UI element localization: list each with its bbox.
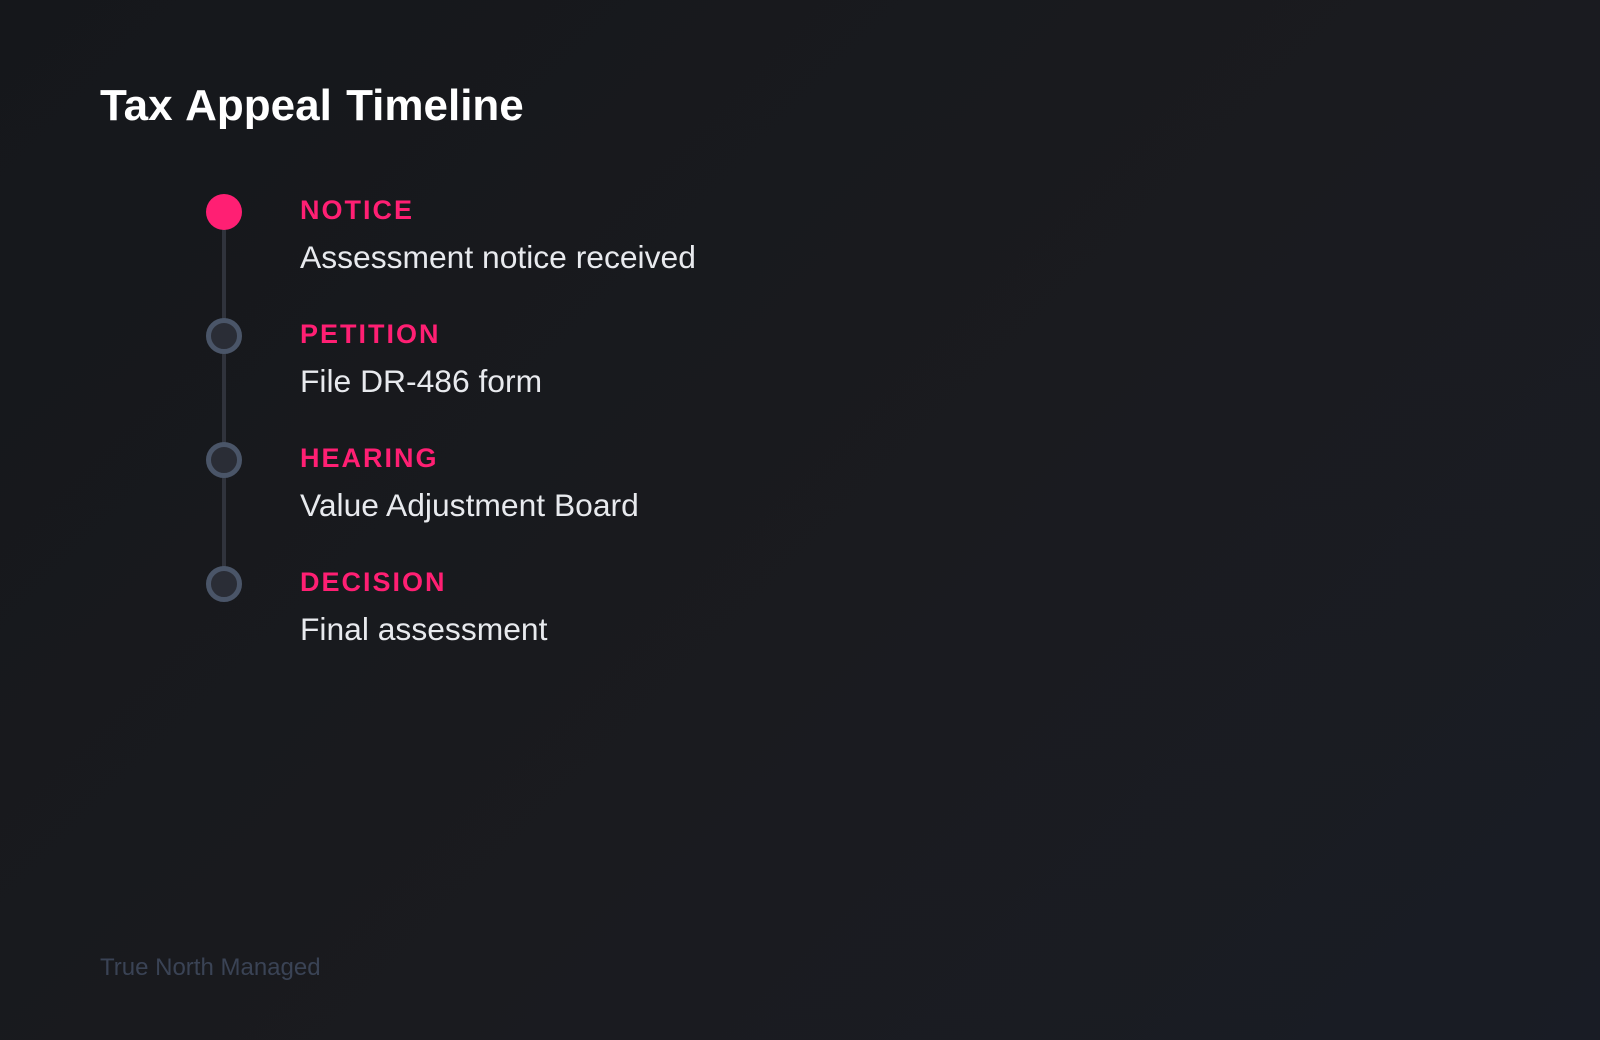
- marker: petition: [206, 318, 242, 354]
- step: decision: Final assessment: [300, 611, 547, 647]
- footer: True North Managed: [100, 954, 321, 981]
- step: hearing: HEARING: [300, 443, 439, 473]
- timeline connector line: [222, 212, 226, 584]
- title: Tax Appeal Timeline: [100, 81, 524, 130]
- step: hearing: Value Adjustment Board: [300, 487, 639, 523]
- marker: decision: [206, 566, 242, 602]
- step: petition: PETITION: [300, 319, 441, 349]
- step: petition: [300, 319, 542, 399]
- step: hearing: [300, 443, 639, 523]
- step: notice: [300, 195, 696, 275]
- step: decision: DECISION: [300, 567, 447, 597]
- step: notice: NOTICE: [300, 195, 414, 225]
- step: notice: Assessment notice received: [300, 239, 696, 275]
- step: petition: File DR-486 form: [300, 363, 542, 399]
- marker: hearing: [206, 442, 242, 478]
- marker: notice: [206, 194, 242, 230]
- step: decision: [300, 567, 548, 647]
